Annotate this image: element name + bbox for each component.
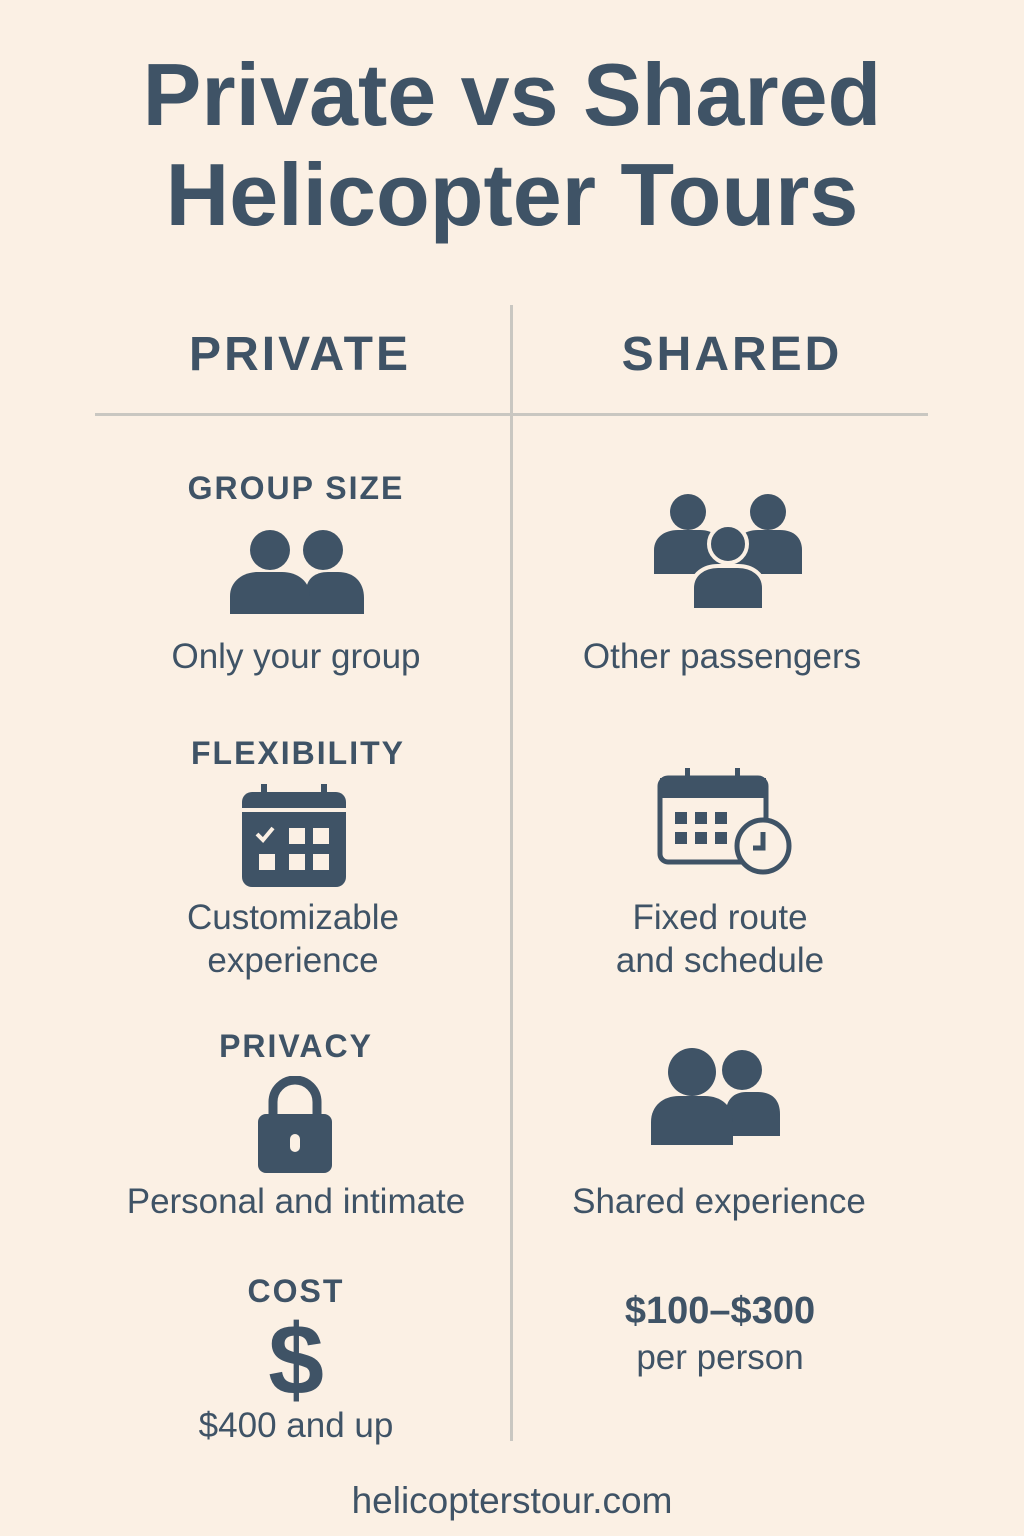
text: shared experience: Shared experience: [572, 1182, 866, 1221]
text: customizable: [187, 898, 399, 980]
label: flexibility: FLEXIBILITY: [191, 735, 405, 771]
label: privacy: PRIVACY: [219, 1028, 373, 1064]
text: fixed route: [616, 898, 824, 980]
title: Helicopter Tours: [166, 145, 858, 244]
footer: helicopterstour.com: [352, 1480, 672, 1521]
text: other passengers: Other passengers: [583, 637, 861, 676]
icon: three people: [654, 494, 802, 608]
icon: calendar clock: [658, 768, 792, 874]
divider vertical: [510, 305, 513, 1441]
text: fixed route: Fixed route: [632, 898, 808, 937]
icon: two people: [230, 530, 364, 614]
label: group size: GROUP SIZE: [188, 470, 404, 506]
header: shared: SHARED: [622, 328, 842, 381]
icon: dollar: $: [268, 1304, 324, 1416]
icon: lock: [258, 1076, 332, 1173]
header: private: PRIVATE: [189, 328, 411, 381]
text: shared price: [625, 1290, 815, 1377]
text: only your group: Only your group: [171, 637, 421, 676]
title: Private vs Shared: [143, 45, 881, 144]
icon: two people shared: [651, 1048, 780, 1145]
text: fixed route: and schedule: [616, 941, 824, 980]
text: 400 and up: $400 and up: [199, 1406, 393, 1445]
text: customizable: Customizable: [187, 898, 399, 937]
text: personal: Personal and intimate: [127, 1182, 465, 1221]
label: cost: COST: [248, 1273, 344, 1309]
icon: calendar check: [242, 784, 346, 887]
text: shared price: per person: [636, 1338, 804, 1377]
title: [143, 45, 881, 244]
text: customizable: experience: [207, 941, 379, 980]
text: shared price: $100–$300: [625, 1290, 815, 1332]
